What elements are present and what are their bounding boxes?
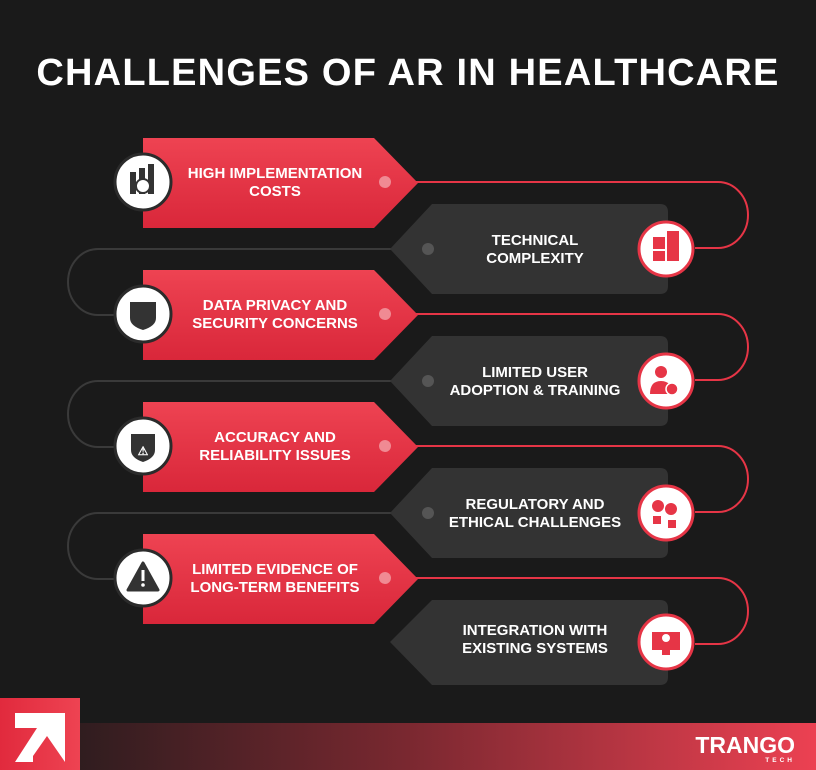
panel: high implementation costs: HIGH IMPLEMENTATION [188,165,362,182]
panel: limited evidence: LONG-TERM BENEFITS [190,579,360,596]
title: CHALLENGES OF AR IN HEALTHCARE [36,52,780,94]
panel: limited user adoption: LIMITED USER [482,364,588,381]
brand: TRANGO [695,732,795,758]
panel: technical complexity: TECHNICAL [492,232,578,249]
panel: integration: INTEGRATION WITH [463,622,607,639]
panel: limited evidence: LIMITED EVIDENCE OF [192,561,358,578]
panel: data privacy: SECURITY CONCERNS [192,315,358,332]
panel: high implementation costs: COSTS [249,183,301,200]
panel: regulatory [390,468,693,558]
panel: limited user adoption [390,336,693,426]
connectors [68,182,748,644]
panel: accuracy [115,402,418,492]
panel: limited user adoption: ADOPTION & TRAINING [450,382,620,399]
panel: accuracy: ⚠ [138,444,149,458]
panel: technical complexity: COMPLEXITY [486,250,584,267]
panel: technical complexity [390,204,693,294]
logo square [0,698,80,770]
panel: accuracy: ACCURACY AND [214,429,336,446]
panel: integration [390,600,693,685]
panel: accuracy: RELIABILITY ISSUES [199,447,351,464]
panel: regulatory: ETHICAL CHALLENGES [449,514,621,531]
panel: data privacy: DATA PRIVACY AND [203,297,347,314]
panel: high implementation costs [115,138,418,228]
brand: TECH [765,757,795,764]
footer band [0,723,816,770]
panel: regulatory: REGULATORY AND [466,496,605,513]
panel: limited evidence [115,534,418,624]
panel: integration: EXISTING SYSTEMS [462,640,608,657]
panel: data privacy [115,270,418,360]
